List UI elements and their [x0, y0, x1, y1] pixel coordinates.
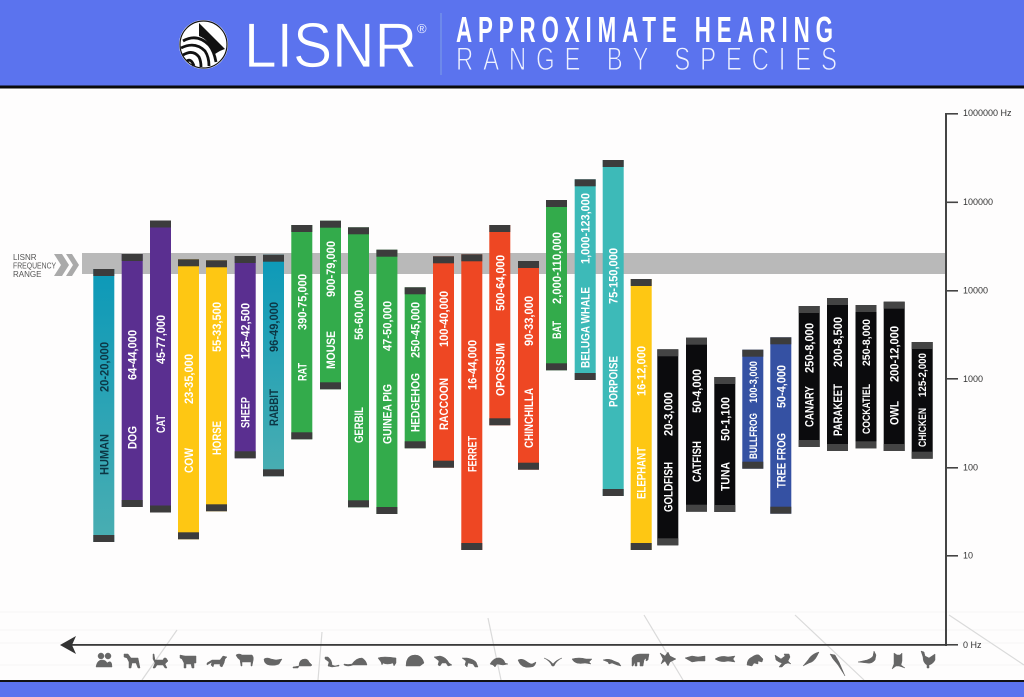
- bar: goldfish: GOLDFISH: [661, 462, 675, 512]
- bar: gerbil: GERBIL: [352, 407, 366, 443]
- bar: elephant: [631, 279, 652, 550]
- axis labels: 1000000 Hz: [963, 108, 1012, 118]
- icon: porpoise: [603, 659, 621, 666]
- header banner: [0, 0, 1024, 88]
- bar: opossum: 500-64,000: [493, 255, 507, 311]
- bar: catfish: [686, 338, 707, 512]
- bar: chinchilla: 90-33,000: [522, 296, 536, 346]
- bar: canary: CANARY: [803, 386, 817, 427]
- icon: rabbit: [264, 658, 282, 665]
- LISNR frequency range label: LISNR: [13, 253, 37, 262]
- species axis arrow: [60, 636, 947, 654]
- bar: ferret: [461, 254, 482, 550]
- bar: chicken: CHICKEN: [917, 408, 929, 447]
- bar: parakeet: [827, 298, 848, 451]
- bar: bullfrog: BULLFROG: [748, 413, 760, 459]
- bar: owl: OWL: [888, 401, 902, 425]
- bar: guinea pig: [376, 250, 397, 514]
- bar: chinchilla: CHINCHILLA: [522, 388, 536, 448]
- bar: cow: 23-35,000: [182, 354, 196, 404]
- bar: elephant: ELEPHANT: [635, 446, 649, 499]
- bar: bat: BAT: [550, 320, 564, 339]
- icon: horse: [207, 656, 227, 667]
- bar: sheep: [235, 256, 256, 458]
- bar: raccoon: RACCOON: [437, 378, 451, 430]
- axis labels: 0 Hz: [963, 640, 982, 650]
- bar: tree frog: 50-4,000: [774, 365, 788, 408]
- axis labels: 10000: [963, 286, 988, 296]
- bar: cow: COW: [182, 447, 196, 473]
- LISNR frequency range label: FREQUENCY: [13, 262, 57, 271]
- bar: gerbil: 56-60,000: [352, 290, 366, 340]
- icon: gerbil: [344, 658, 367, 666]
- bar: bat: 2,000-110,000: [550, 232, 564, 304]
- bar: elephant: 16-12,000: [635, 346, 649, 396]
- footer banner: [0, 680, 1024, 697]
- bar: beluga whale: 1,000-123,000: [579, 193, 593, 264]
- bar: porpoise: [603, 160, 624, 496]
- icon: owl: [892, 653, 905, 669]
- bar: parakeet: PARAKEET: [831, 383, 845, 436]
- icon: bullfrog: [747, 655, 763, 666]
- bar: chicken: [912, 342, 933, 459]
- registered mark: ®: [417, 21, 427, 36]
- bar: horse: HORSE: [210, 421, 224, 455]
- bar: catfish: 50-4,000: [690, 369, 704, 413]
- bar: raccoon: [433, 256, 454, 468]
- icon: chevrons: [54, 254, 79, 276]
- icon: chicken: [921, 651, 935, 668]
- icon: opossum: [490, 658, 508, 667]
- bar: cow: [178, 259, 199, 539]
- bar: beluga whale: [575, 179, 596, 380]
- bar: mouse: 900-79,000: [324, 241, 338, 297]
- bar: cat: [150, 220, 171, 512]
- bar: human: [93, 269, 114, 542]
- bar: tree frog: [770, 337, 791, 514]
- bar: owl: [884, 302, 905, 451]
- bar: tuna: TUNA: [718, 462, 732, 491]
- icon: mouse: [293, 659, 312, 668]
- icon: bat: [544, 658, 562, 666]
- bar: cockatiel: [856, 305, 876, 448]
- bar: mouse: [320, 221, 341, 389]
- frequency axis: [945, 108, 1012, 650]
- bar: sheep: 125-42,500: [239, 303, 253, 359]
- bar: ferret: 16-44,000: [465, 340, 479, 390]
- bar: rat: [291, 225, 312, 439]
- axis labels: 100: [963, 462, 978, 472]
- bar: guinea pig: 47-50,000: [380, 301, 394, 351]
- icon: human: [96, 653, 112, 667]
- bar: opossum: OPOSSUM: [493, 343, 507, 396]
- bar: mouse: MOUSE: [324, 331, 338, 369]
- bar: tree frog: TREE FROG: [774, 433, 788, 488]
- bar: catfish: CATFISH: [690, 441, 704, 482]
- bar: rabbit: [263, 255, 284, 476]
- axis labels: 100000: [963, 197, 993, 207]
- bar: bullfrog: 100-3,000: [748, 361, 760, 403]
- bar: rabbit: RABBIT: [267, 388, 281, 426]
- icon: hedgehog: [406, 655, 424, 666]
- icon: tree frog: [775, 654, 791, 667]
- bar: canary: 250-8,000: [803, 323, 817, 373]
- bar: canary: [799, 306, 820, 447]
- axis labels: 1000: [963, 374, 983, 384]
- bar: cockatiel: 250-8,000: [861, 319, 873, 366]
- bar: owl: 200-12,000: [888, 326, 902, 382]
- logo wordmark: LISNR: [244, 11, 417, 81]
- bar: gerbil: [348, 227, 369, 507]
- bar: rat: 390-75,000: [295, 274, 309, 330]
- bar: horse: 55-33,500: [210, 302, 224, 352]
- bar: cat: CAT: [154, 414, 168, 433]
- bar: sheep: SHEEP: [239, 397, 253, 428]
- icon: elephant: [632, 654, 649, 666]
- bar: raccoon: 100-40,000: [437, 291, 451, 347]
- LISNR frequency range band: [82, 253, 946, 274]
- bar: ferret: FERRET: [465, 435, 479, 472]
- icon: tuna: [715, 656, 735, 662]
- icon: cow: [180, 655, 196, 668]
- LISNR frequency range label: RANGE: [13, 270, 41, 279]
- bar: opossum: [489, 225, 510, 425]
- axis labels: [963, 108, 1012, 650]
- axis labels: 10: [963, 550, 973, 560]
- icon: goldfish: [660, 652, 676, 666]
- bar: cockatiel: COCKATIEL: [861, 384, 873, 434]
- title line 2: RANGE BY SPECIES: [456, 41, 837, 77]
- bar: dog: [122, 254, 143, 507]
- bar: chinchilla: [518, 261, 539, 470]
- bar: tuna: 50-1,100: [718, 397, 732, 441]
- icon: parakeet: [830, 654, 845, 676]
- bar: goldfish: [657, 349, 678, 545]
- bar: dog: 64-44,000: [126, 330, 140, 380]
- bar: porpoise: 75-150,000: [607, 248, 621, 304]
- bar: beluga whale: BELUGA WHALE: [579, 287, 593, 368]
- bar: goldfish: 20-3,000: [661, 392, 675, 436]
- bar: cat: 45-77,000: [154, 315, 168, 364]
- icon: cat: [153, 654, 168, 668]
- bar: hedgehog: 250-45,000: [409, 302, 423, 358]
- icon: rat: [325, 657, 339, 667]
- icon: canary: [803, 652, 819, 666]
- icon: cockatiel: [858, 651, 876, 663]
- icon: raccoon: [434, 656, 452, 666]
- icon: catfish: [685, 656, 705, 662]
- bar: hedgehog: [405, 287, 426, 448]
- bar: bat: [546, 200, 567, 370]
- bar: horse: [206, 260, 227, 511]
- icon: dog: [124, 654, 140, 668]
- bar: dog: DOG: [126, 426, 140, 449]
- icon: LISNR logo: [179, 20, 228, 69]
- bar: guinea pig: GUINEA PIG: [380, 384, 394, 444]
- bar: rat: RAT: [295, 362, 309, 381]
- species icons: [96, 651, 935, 676]
- bar: bullfrog: [742, 350, 763, 469]
- bar: porpoise: PORPOISE: [607, 356, 621, 407]
- bar: tuna: [714, 377, 735, 512]
- icon: beluga whale: [572, 658, 592, 664]
- icon: sheep: [236, 654, 253, 666]
- bar: chicken: 125-2,000: [917, 353, 929, 397]
- title line 1: APPROXIMATE HEARING: [456, 11, 833, 50]
- icon: ferret: [462, 658, 478, 667]
- bar: human: 20-20,000: [98, 342, 112, 392]
- icon: guinea pig: [378, 657, 396, 666]
- icon: chinchilla: [518, 659, 536, 667]
- bar: rabbit: 96-49,000: [267, 302, 281, 352]
- bar: hedgehog: HEDGEHOG: [409, 373, 423, 432]
- bar: parakeet: 200-8,500: [831, 317, 845, 367]
- bar: human: HUMAN: [98, 434, 112, 475]
